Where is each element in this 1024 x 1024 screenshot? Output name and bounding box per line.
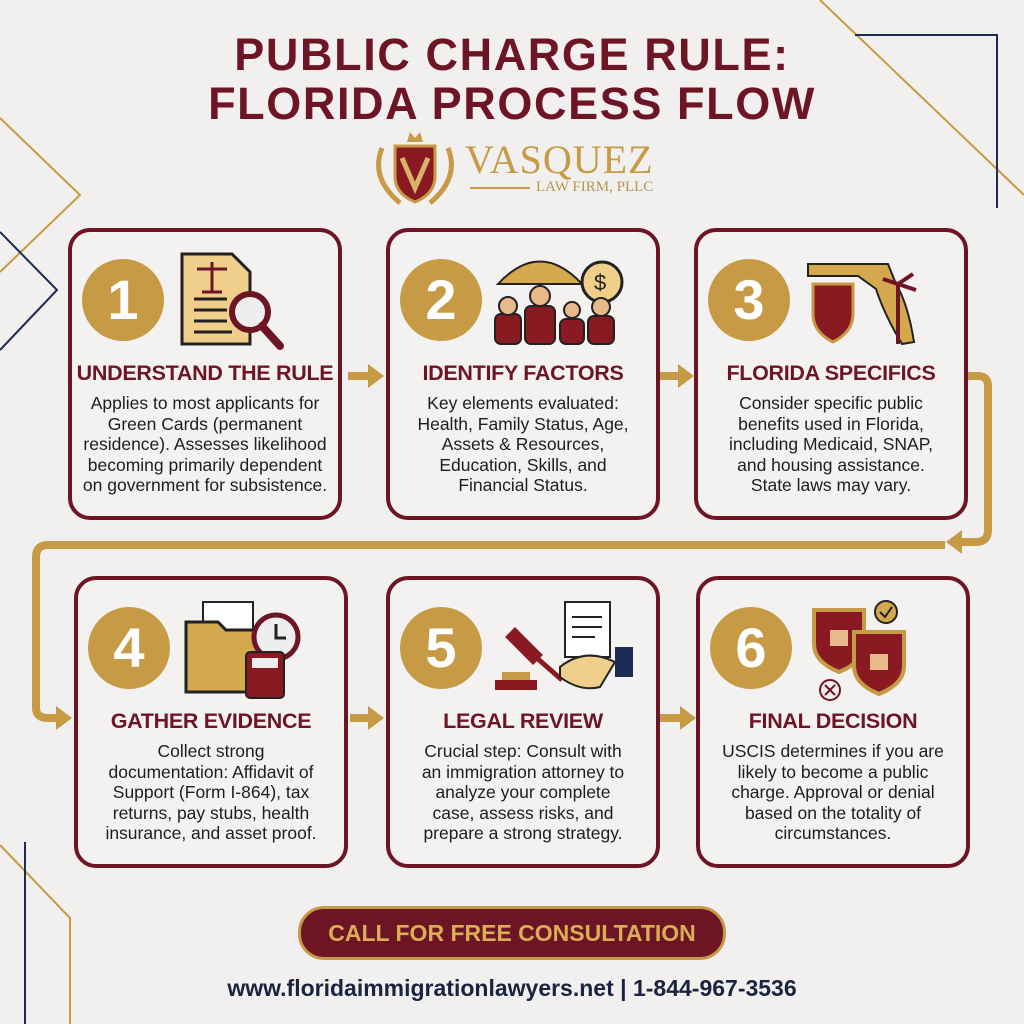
logo: LAW FIRM, PLLC: [536, 179, 653, 195]
panel: 2 identify factors: IDENTIFY FACTORS: [422, 361, 624, 385]
panel: 5 legal review: case, assess risks, and: [433, 802, 613, 822]
panel: 6 final decision: USCIS determines if you are: [722, 741, 944, 761]
logo: [376, 132, 654, 205]
panel: 2 identify factors: Assets & Resources,: [442, 434, 604, 454]
CTA button: [298, 906, 726, 960]
panel: 4 gather evidence: documentation: Affidavit of: [109, 762, 313, 782]
CTA button: CALL FOR FREE CONSULTATION: [328, 920, 696, 946]
panel: 6 final decision: [696, 576, 970, 868]
panel: 2 identify factors: Financial Status.: [458, 475, 588, 495]
panel: 4 gather evidence: Support (Form I-864), tax: [113, 782, 309, 802]
text: residence). Assesses likelihood: [83, 434, 327, 454]
panel: 5 legal review: [386, 576, 660, 868]
heading: UNDERSTAND THE RULE: [77, 361, 333, 385]
panel: 4 gather evidence: Collect strong: [158, 741, 264, 761]
icon: gavel handshake: [495, 601, 633, 690]
text: on government for subsistence.: [83, 475, 327, 495]
icon: shields thumbs: [812, 600, 906, 701]
panel: 6 final decision: likely to become a public: [738, 762, 928, 782]
panel: 5 legal review: analyze your complete: [435, 782, 611, 802]
panel: 6 final decision: circumstances.: [775, 823, 891, 843]
panel: 4 gather evidence: [74, 576, 348, 868]
panel: 3 florida specifics: [694, 228, 968, 520]
panel: 5 legal review: prepare a strong strategy.: [423, 823, 623, 843]
panel: 2 identify factors: Health, Family Status, Age,: [417, 414, 629, 434]
panel: 4 gather evidence: GATHER EVIDENCE: [111, 709, 311, 733]
panel: 3 florida specifics: State laws may vary.: [751, 475, 911, 495]
panel: 2 identify factors: Education, Skills, and: [439, 454, 607, 474]
panel: 3 florida specifics: and housing assistance.: [737, 454, 925, 474]
icon: florida map shield: [807, 263, 917, 346]
panel: 2 identify factors: 2: [425, 268, 457, 331]
number 1: [82, 259, 164, 341]
number 1: 1: [107, 268, 139, 331]
icon: folder clock calculator: [184, 601, 300, 699]
panel: 5 legal review: an immigration attorney to: [422, 762, 624, 782]
panel: 3 florida specifics: including Medicaid, SNAP,: [729, 434, 933, 454]
text: [83, 393, 327, 495]
panel: 3 florida specifics: Consider specific public: [739, 393, 923, 413]
panel: 1 understand the rule: [68, 228, 342, 520]
panel: 6 final decision: FINAL DECISION: [749, 709, 917, 733]
title: PUBLIC CHARGE RULE:: [234, 29, 790, 80]
panel: 4 gather evidence: 4: [113, 616, 145, 679]
title: FLORIDA PROCESS FLOW: [208, 78, 816, 129]
icon: document magnifier: [180, 252, 284, 350]
text: becoming primarily dependent: [88, 454, 322, 474]
title: [208, 29, 816, 129]
panel: 4 gather evidence: insurance, and asset proof.: [105, 823, 317, 843]
panel: 5 legal review: Crucial step: Consult with: [424, 741, 622, 761]
panel: 6 final decision: charge. Approval or denial: [731, 782, 935, 802]
contact line: www.floridaimmigrationlawyers.net | 1-844-967-3536: [227, 975, 797, 1001]
text: Green Cards (permanent: [108, 414, 302, 434]
logo: VASQUEZ: [465, 137, 654, 182]
icon: family umbrella: $: [594, 270, 606, 295]
panel: 3 florida specifics: FLORIDA SPECIFICS: [726, 361, 936, 385]
panel: 2 identify factors: [386, 228, 660, 520]
panel: 5 legal review: LEGAL REVIEW: [443, 709, 603, 733]
panel: 2 identify factors: Key elements evaluated:: [427, 393, 619, 413]
panel: 5 legal review: 5: [425, 616, 457, 679]
text: Applies to most applicants for: [91, 393, 319, 413]
panel: 6 final decision: based on the totality of: [745, 802, 921, 822]
panel: 3 florida specifics: 3: [733, 268, 765, 331]
icon: family umbrella: [494, 260, 624, 345]
panel: 6 final decision: 6: [735, 616, 767, 679]
panel: 4 gather evidence: returns, pay stubs, health: [113, 802, 309, 822]
panel: 3 florida specifics: benefits used in Florida,: [738, 414, 924, 434]
